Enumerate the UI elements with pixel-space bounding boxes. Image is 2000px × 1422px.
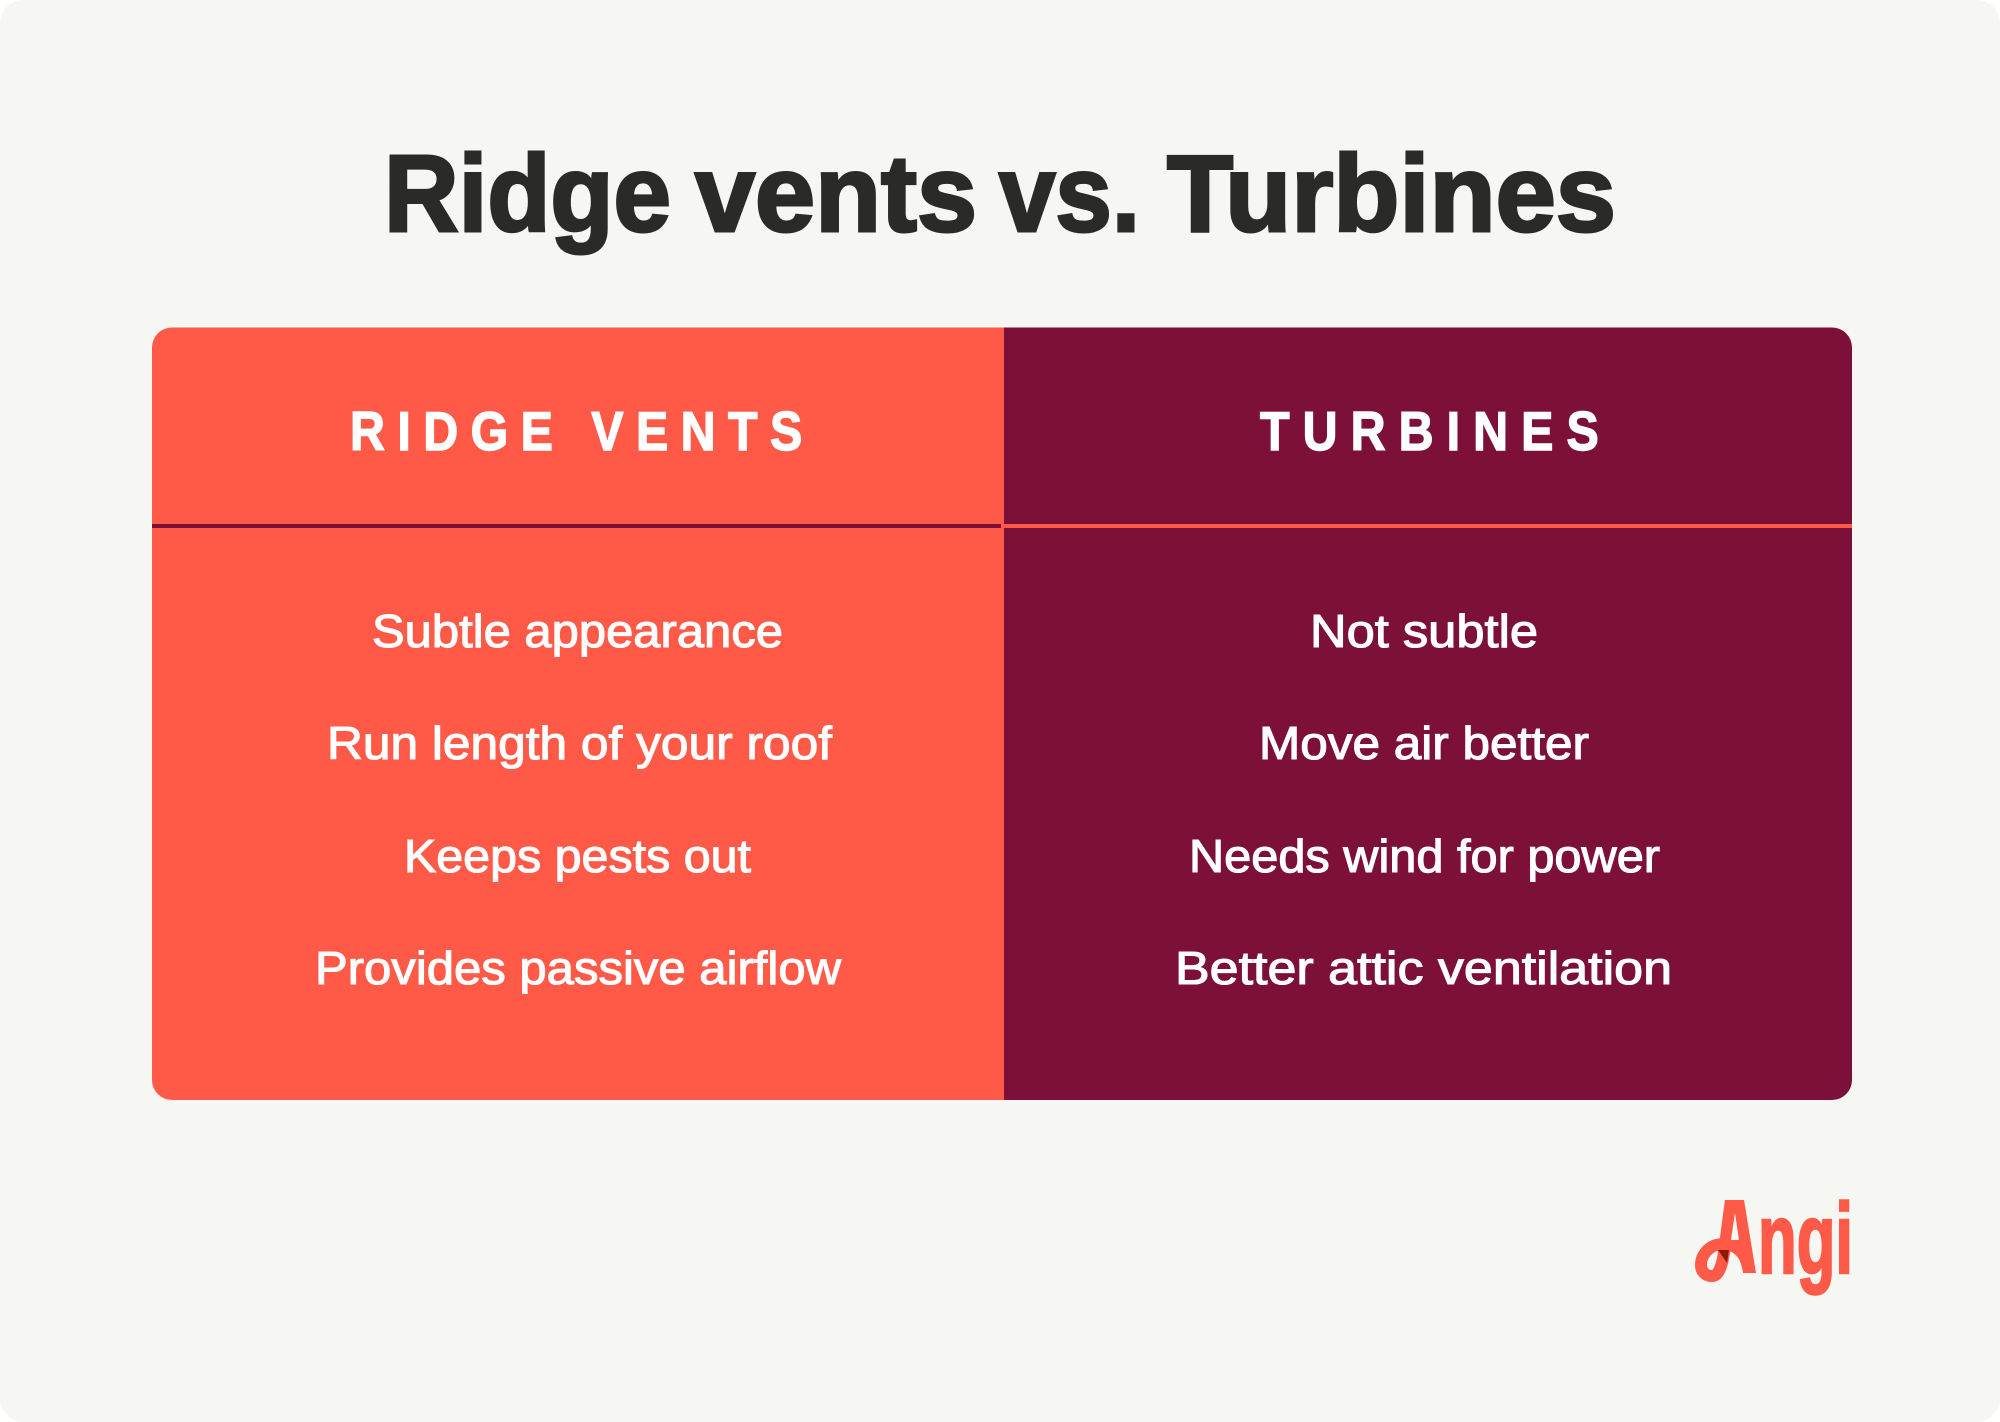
list: ridge vents points: Subtle appearance — [372, 605, 783, 657]
list: ridge vents points: Provides passive airflow — [315, 942, 842, 994]
list: ridge vents points: Keeps pests out — [404, 830, 751, 882]
title — [384, 133, 1616, 255]
heading: ridge vents: RIDGE VENTS — [350, 400, 802, 462]
list: ridge vents points — [315, 605, 842, 994]
list: ridge vents points: Run length of your roof — [327, 717, 832, 769]
title: vs. — [999, 133, 1140, 255]
title: Turbines — [1167, 133, 1616, 255]
list: turbines points: Needs wind for power — [1189, 830, 1660, 882]
logo: Angi — [1695, 1199, 1850, 1296]
list: turbines points: Better attic ventilation — [1175, 942, 1672, 994]
list: turbines points: Not subtle — [1310, 605, 1538, 657]
comparison table — [152, 328, 1852, 1100]
logo: Angi: ngi — [1758, 1183, 1853, 1295]
panel: turbines — [1004, 328, 1852, 1100]
logo: Angi: A — [1707, 1178, 1757, 1296]
list: turbines points: Move air better — [1259, 717, 1589, 769]
panel: ridge vents — [152, 328, 1004, 1100]
list: turbines points — [1175, 605, 1672, 994]
title: Ridge — [384, 133, 671, 255]
title: vents — [695, 133, 977, 255]
heading: turbines: TURBINES — [1260, 400, 1599, 462]
